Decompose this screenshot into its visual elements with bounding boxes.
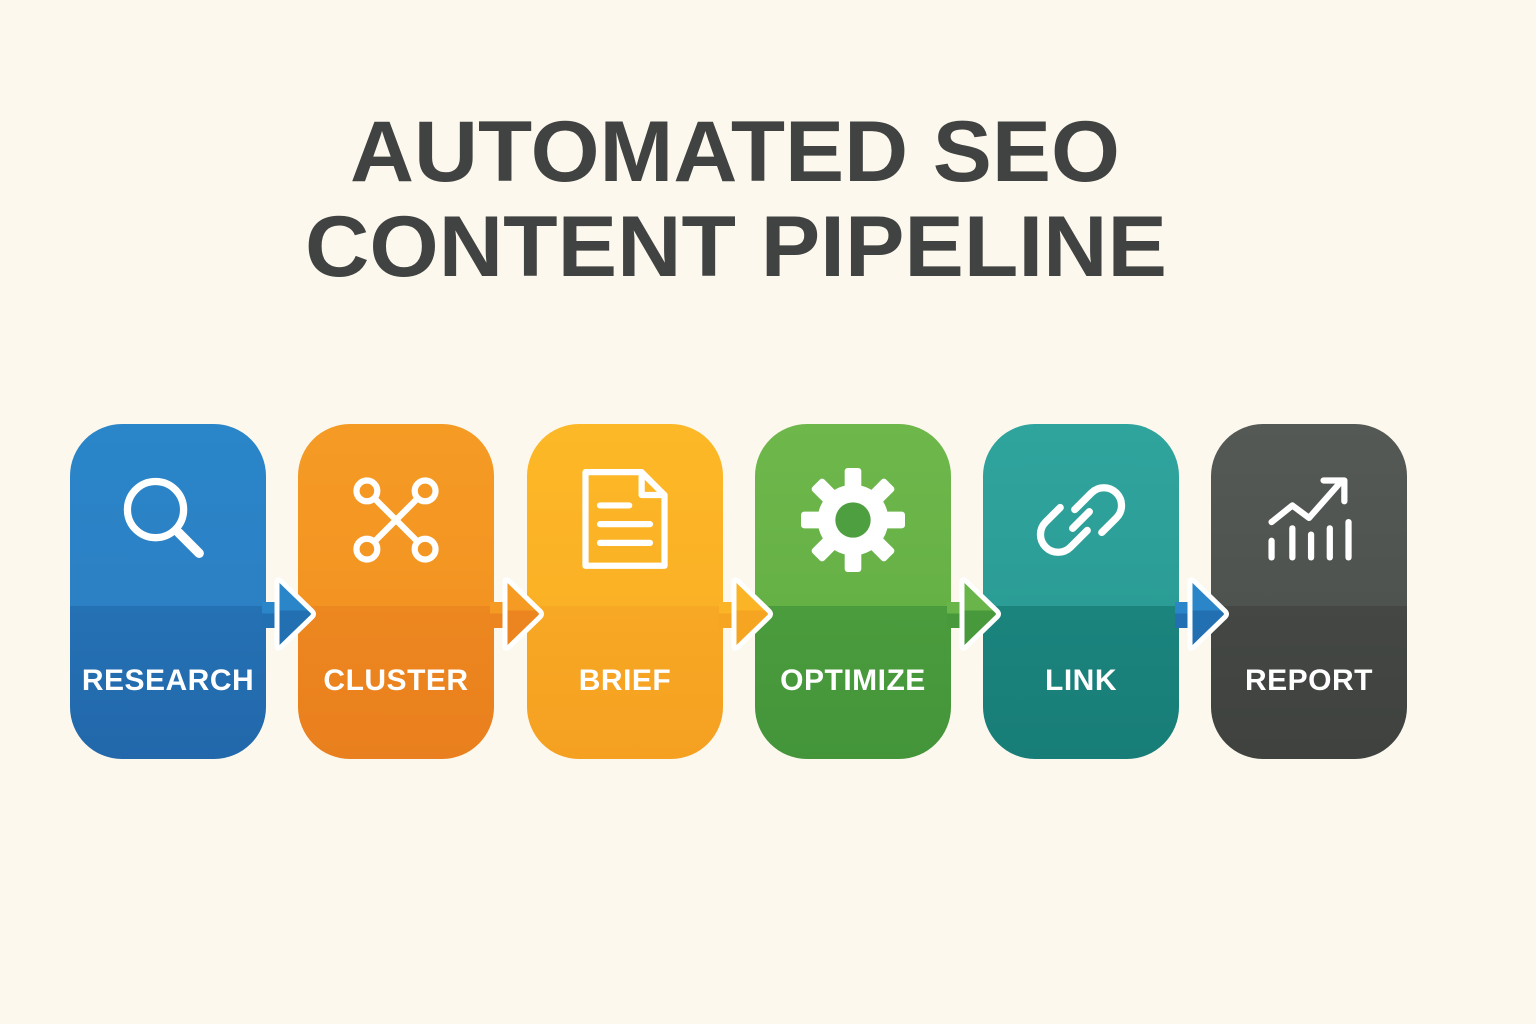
card: brief: [527, 424, 723, 759]
card: link: [983, 424, 1179, 759]
label: research: RESEARCH: [82, 664, 254, 697]
card: optimize: [755, 424, 951, 759]
arrow 2: [490, 578, 544, 650]
label: optimize: OPTIMIZE: [780, 664, 926, 697]
label: cluster: CLUSTER: [323, 664, 469, 697]
label: brief: BRIEF: [579, 664, 671, 697]
icon: chain link: [1036, 484, 1126, 556]
label: report: REPORT: [1245, 664, 1373, 697]
arrow 3: [719, 578, 773, 650]
icon: document: [582, 469, 668, 569]
label: link: LINK: [1045, 664, 1117, 697]
arrow 1: [262, 578, 316, 650]
title: AUTOMATED SEO: [350, 104, 1120, 200]
card: report: [1211, 424, 1407, 759]
icon: growth chart: [1268, 477, 1352, 560]
title: [305, 104, 1167, 295]
title: CONTENT PIPELINE: [305, 199, 1167, 295]
icon: magnifier: [124, 478, 204, 558]
card: research: [70, 424, 266, 759]
arrow 5: [1175, 578, 1229, 650]
card: cluster: [298, 424, 494, 759]
icon: gear: [801, 468, 905, 572]
arrow 4: [947, 578, 1001, 650]
icon: cluster nodes: [353, 477, 439, 563]
